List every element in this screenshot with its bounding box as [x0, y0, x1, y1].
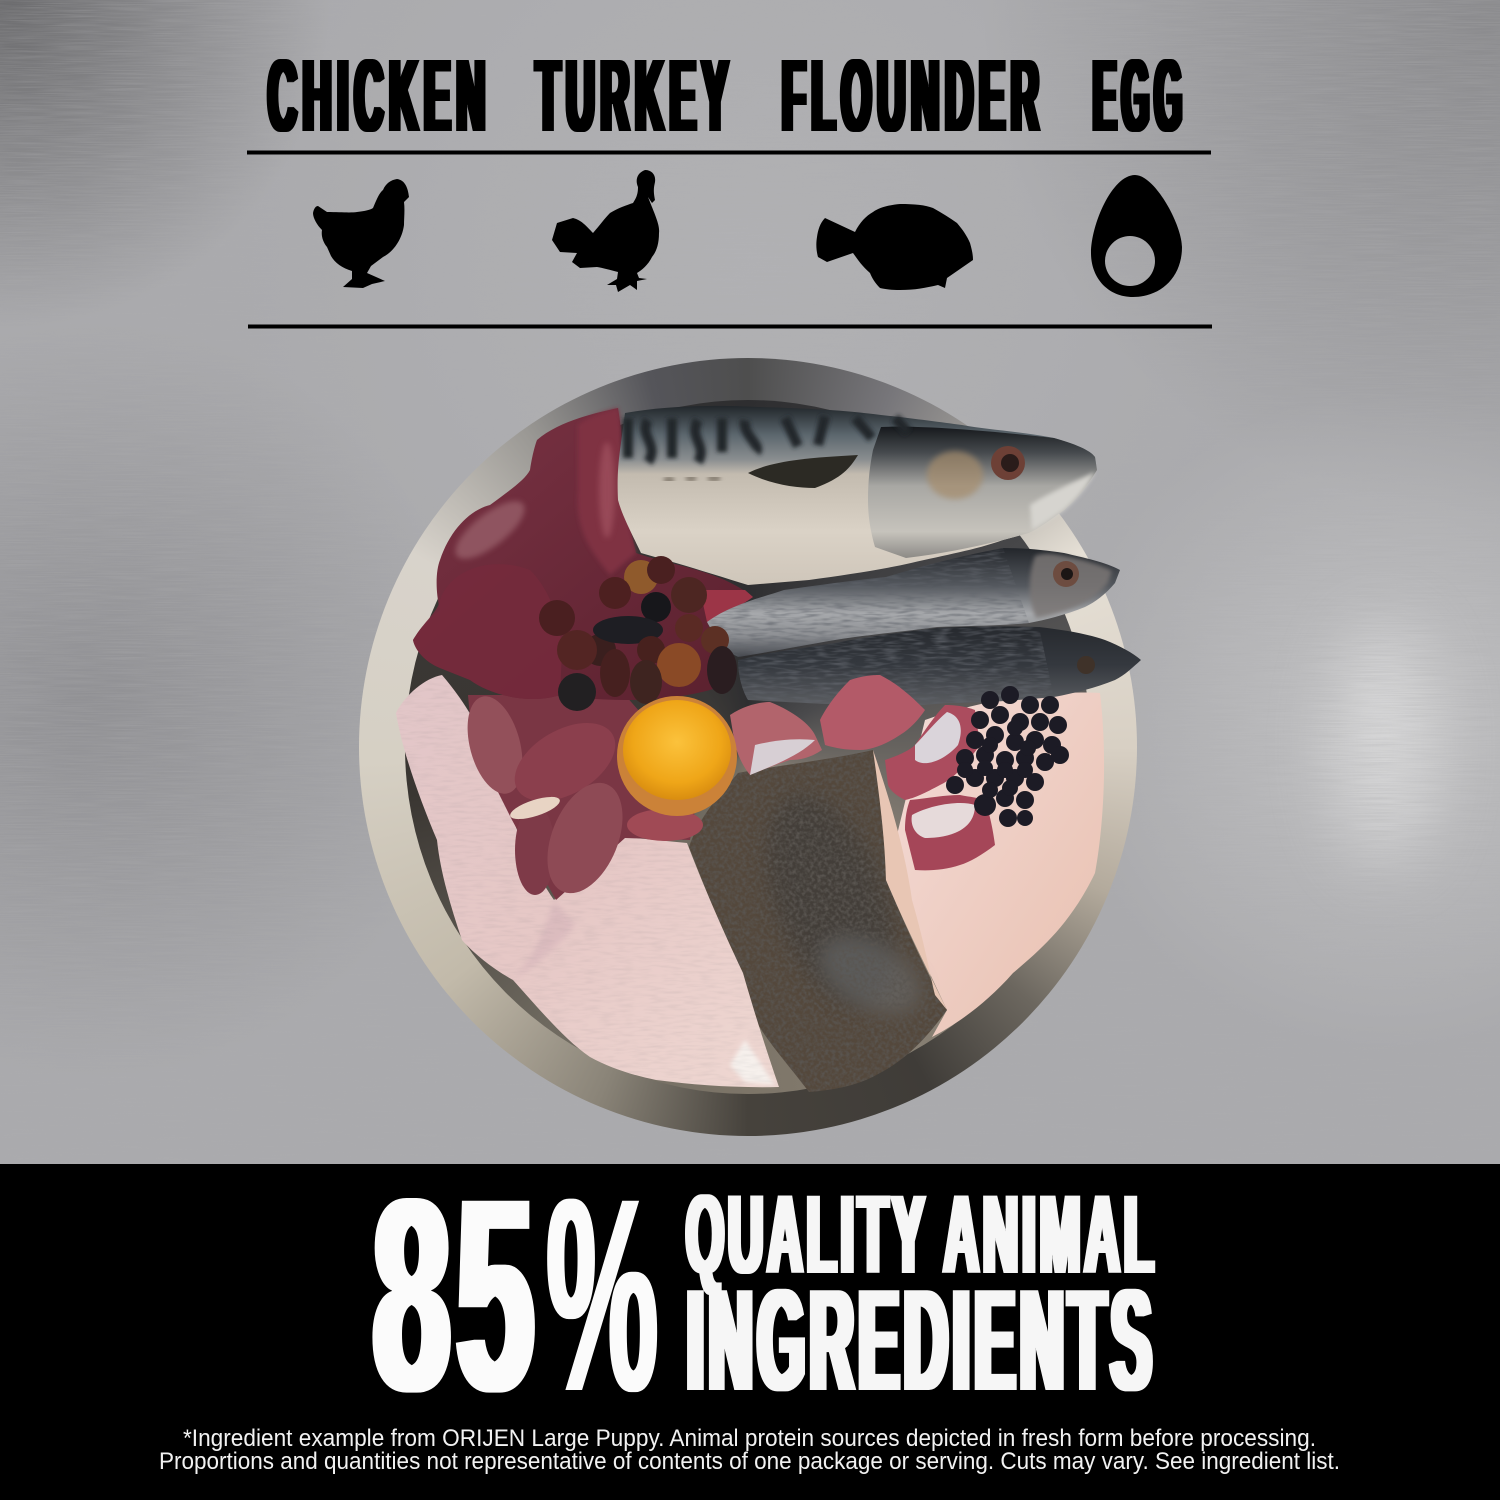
liver: [413, 408, 753, 700]
dried berries: [539, 556, 737, 711]
second sardine: [738, 626, 1141, 706]
icon: chicken: [313, 179, 409, 288]
gizzard pieces: [730, 675, 995, 870]
label: chicken: CHICKEN: [268, 37, 491, 153]
label: flounder: FLOUNDER: [782, 40, 1045, 154]
footnote line one: *Ingredient example from ORIJEN Large Puppy. Animal protein sources depicted in fresh form before processing.: [183, 1425, 1316, 1452]
big number: 85: [373, 1143, 540, 1449]
percent sign: %: [546, 1142, 658, 1449]
chicken breast: [886, 692, 1104, 1037]
juniper berries: [946, 686, 1069, 827]
label: turkey: TURKEY: [536, 37, 734, 153]
icon: flounder: [816, 204, 973, 290]
bowl floor: [405, 400, 1091, 1094]
bottom rule: [248, 324, 1212, 328]
mackerel: [618, 406, 1097, 585]
bowl rim: [359, 358, 1137, 1136]
flounder fillet: [689, 750, 947, 1092]
footnote line two: Proportions and quantities not representative of contents of one package or serving. Cuts may vary. See ingredient list.: [159, 1448, 1340, 1475]
headline line one: QUALITY ANIMAL: [686, 1173, 1158, 1298]
organ meats under the egg: [458, 690, 703, 904]
chicken thigh: [396, 675, 779, 1087]
top rule: [247, 150, 1211, 154]
headline line two: INGREDIENTS: [687, 1258, 1156, 1421]
sardine: [707, 548, 1120, 657]
bottom banner: [0, 1142, 1500, 1500]
icon: turkey: [552, 170, 659, 292]
label: egg: EGG: [1093, 39, 1187, 154]
cracked egg yolk: [617, 696, 737, 816]
icon: egg: [1091, 175, 1182, 297]
